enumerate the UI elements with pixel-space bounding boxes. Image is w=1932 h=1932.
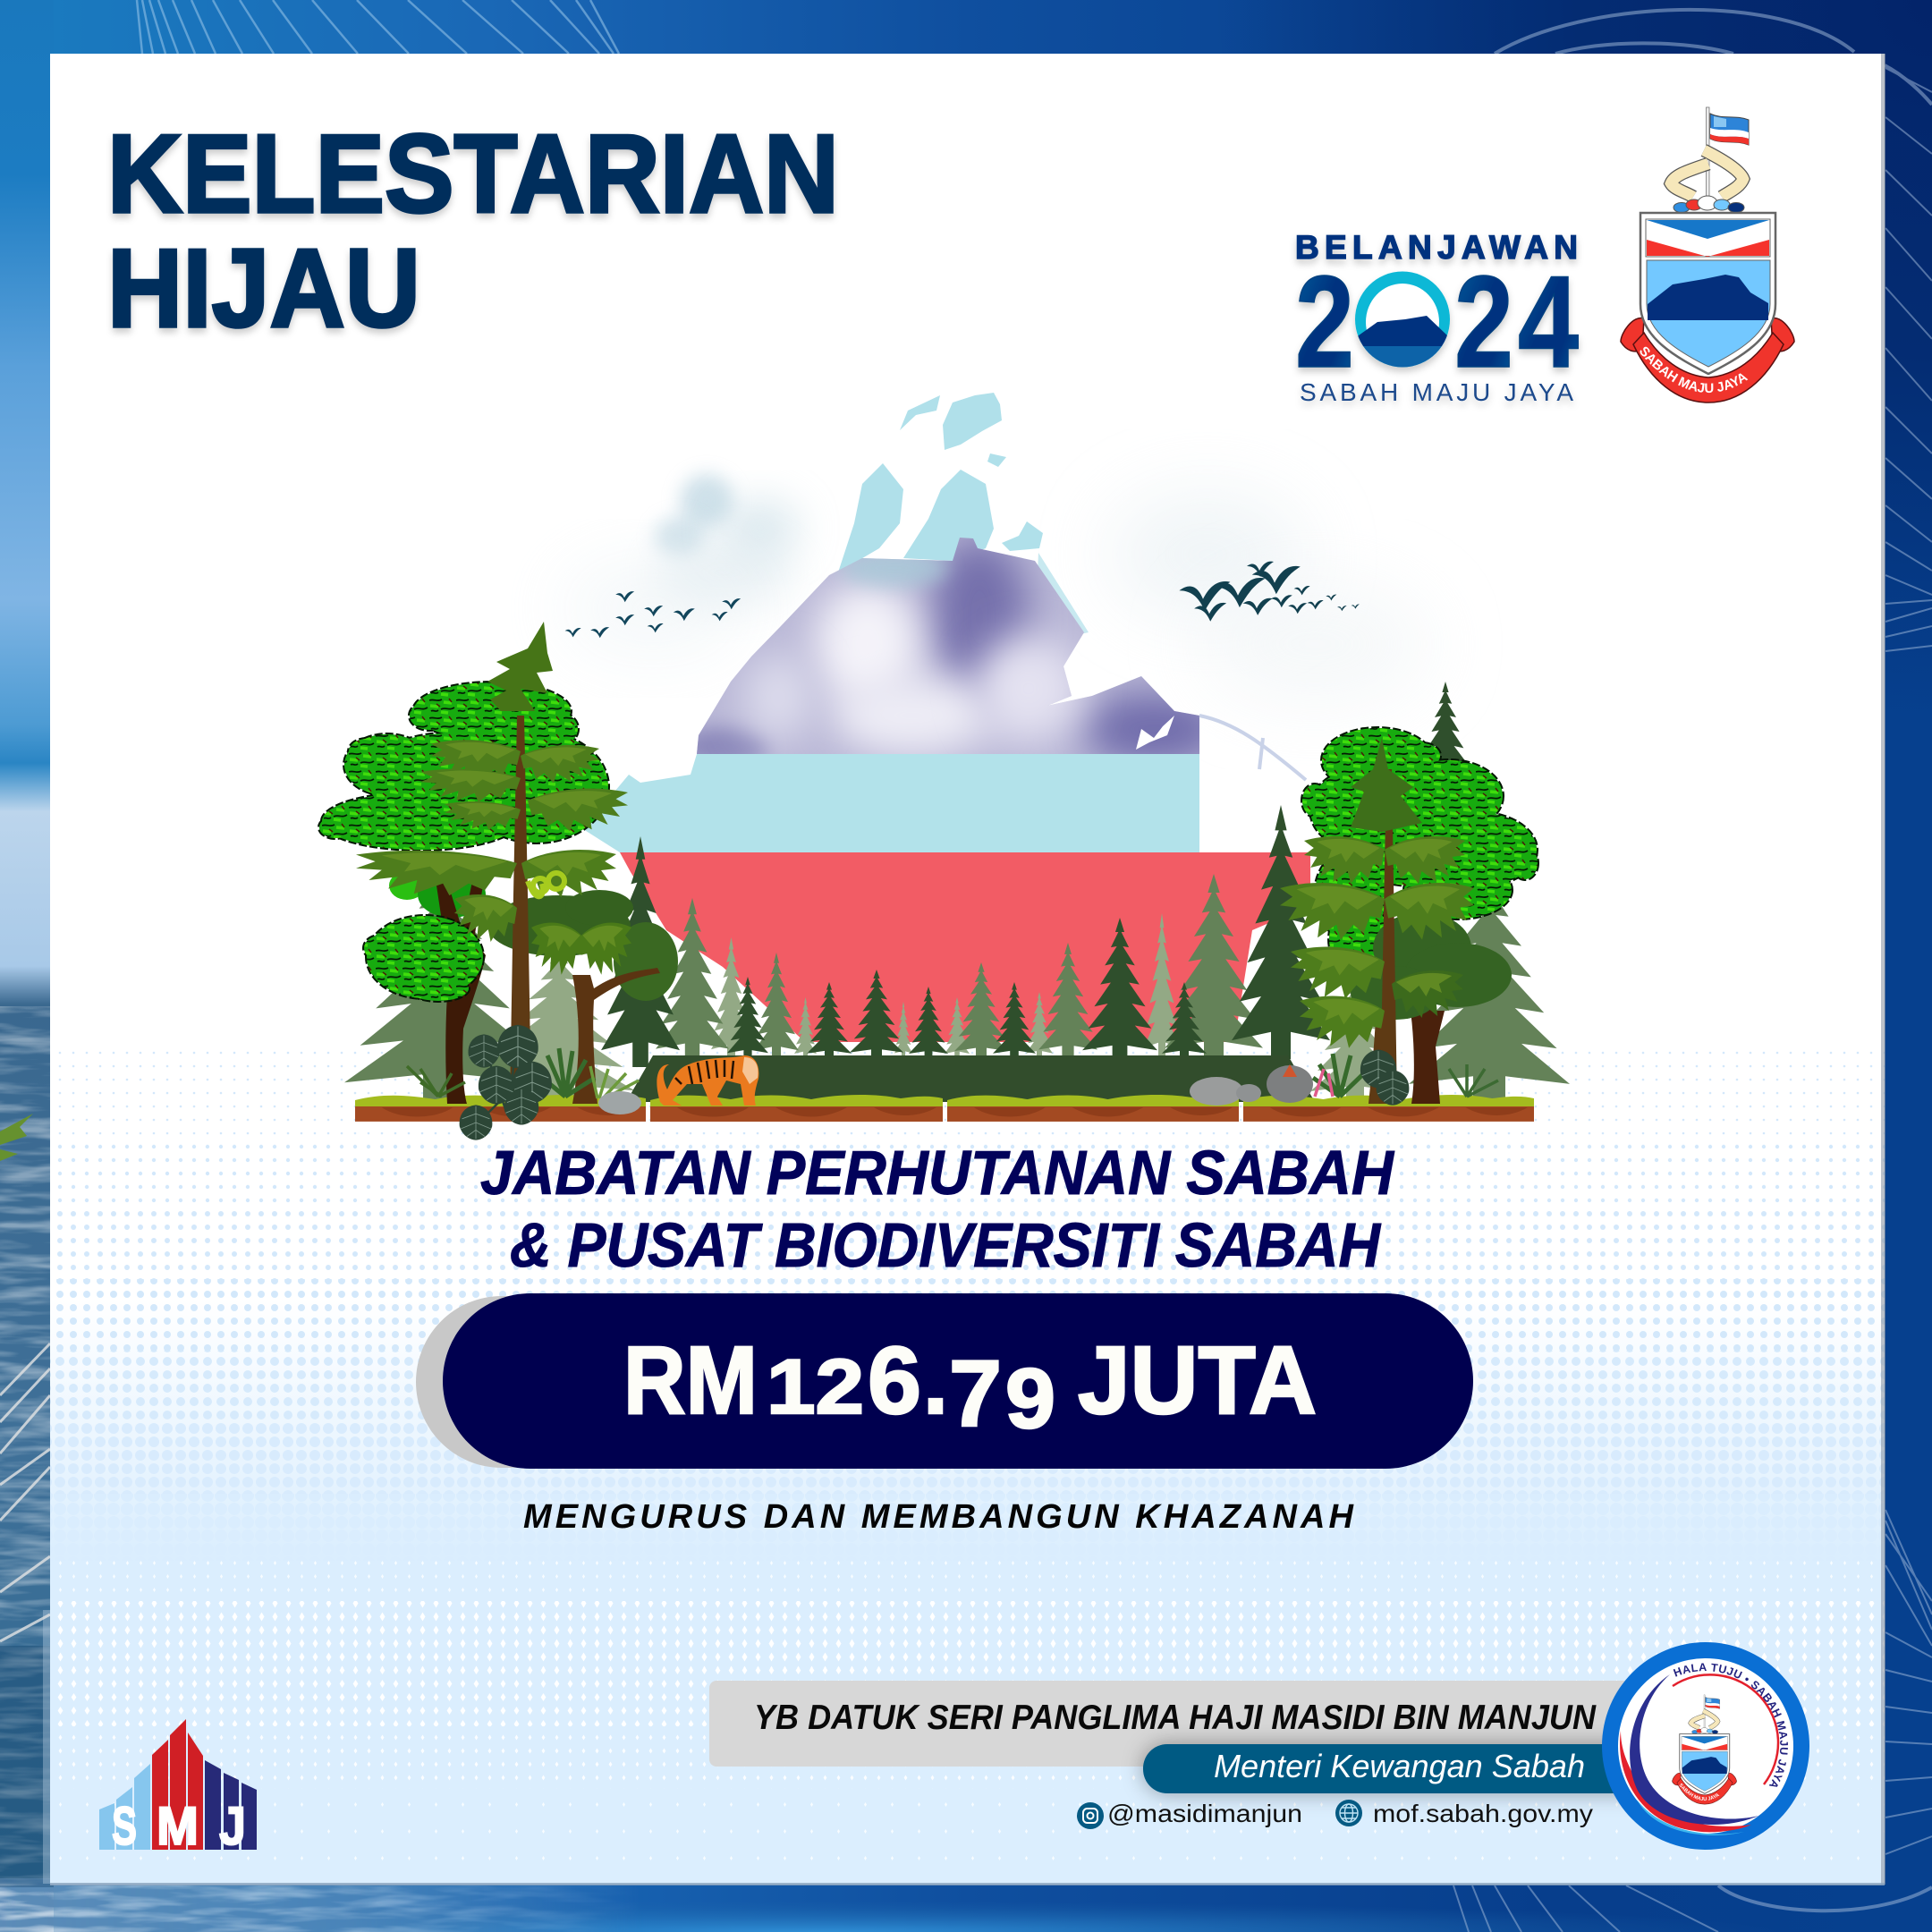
minister title pill: Menteri Kewangan Sabah	[1214, 1748, 1585, 1784]
ground strips	[355, 1095, 1534, 1122]
badge: Hala Tuju Sabah Maju Jaya: HALA TUJU • SABAH MAJU JAYA	[1673, 1664, 1788, 1787]
heading: agencies: & PUSAT BIODIVERSITI SABAH	[510, 1210, 1381, 1280]
snake	[528, 873, 564, 896]
logo: Belanjawan 2024	[1295, 229, 1579, 406]
logo: SMJ: S	[112, 1796, 137, 1856]
social handles	[1077, 1800, 1593, 1829]
amount text: 6	[868, 1326, 921, 1434]
logo: SMJ	[99, 1719, 257, 1856]
logo: SMJ: M	[157, 1796, 199, 1856]
minister title pill	[1143, 1744, 1637, 1793]
minister name bar	[709, 1681, 1631, 1767]
title	[107, 113, 839, 351]
logo: Belanjawan 2024: BELANJAWAN	[1295, 229, 1578, 266]
badge: Hala Tuju Sabah Maju Jaya	[1602, 1642, 1809, 1850]
amount text: .	[923, 1326, 948, 1434]
heading: agencies: JABATAN PERHUTANAN SABAH	[480, 1138, 1394, 1208]
dark oak canopy	[1351, 912, 1512, 1020]
amount text	[623, 1326, 1317, 1446]
logo: Sabah state crest	[1621, 107, 1794, 402]
conifer fronds	[1280, 738, 1474, 1104]
clouds behind map	[564, 474, 1431, 707]
title: KELESTARIAN	[107, 113, 839, 236]
logo: Belanjawan 2024: 2	[1454, 249, 1513, 394]
map of Sabah in flag colours	[583, 393, 1310, 1042]
amount text: RM	[623, 1326, 758, 1434]
map: red band	[620, 852, 1310, 1042]
icon: globe	[1335, 1800, 1362, 1826]
logo: Belanjawan 2024: 4	[1518, 249, 1579, 394]
broadleaf tree left	[319, 682, 608, 1104]
logo: Belanjawan 2024: SABAH MAJU JAYA	[1300, 378, 1573, 406]
amount text: JUTA	[1078, 1326, 1317, 1434]
amount text: 12	[767, 1344, 864, 1430]
tiger	[657, 1055, 758, 1106]
logo: SMJ: J	[219, 1796, 246, 1856]
tree group: right	[1280, 728, 1538, 1104]
broadleaf canopy	[1302, 728, 1538, 975]
title: HIJAU	[107, 227, 420, 351]
third tree: dark canopy with trunk	[487, 890, 678, 1104]
undergrowth: plants and rocks	[407, 1025, 1498, 1140]
icon: mini crest	[1673, 1695, 1737, 1804]
minister name bar: YB DATUK SERI PANGLIMA HAJI MASIDI BIN MANJUN	[754, 1699, 1597, 1737]
tree group: left	[319, 622, 678, 1104]
map: river line	[1199, 716, 1306, 780]
map: purple cloud section	[697, 538, 1199, 754]
subheading: MENGURUS DAN MEMBANGUN KHAZANAH	[523, 1498, 1355, 1536]
social handles: mof.sabah.gov.my	[1373, 1800, 1593, 1827]
allocation pill	[416, 1293, 1473, 1469]
amount text: 9	[1005, 1352, 1055, 1446]
birds: right flock	[1179, 562, 1360, 622]
birds: left flock	[565, 591, 741, 638]
map: light-blue band	[583, 754, 1199, 852]
social handles: @masidimanjun	[1107, 1800, 1302, 1827]
forest background: conifers	[344, 682, 1570, 1102]
heading: agencies	[480, 1138, 1394, 1280]
logo: Belanjawan 2024: 2	[1295, 249, 1354, 394]
map: islands	[838, 393, 1089, 637]
conifer trunk and fronds	[356, 622, 628, 1104]
icon: instagram	[1077, 1802, 1104, 1829]
amount text: 7	[949, 1342, 1002, 1446]
